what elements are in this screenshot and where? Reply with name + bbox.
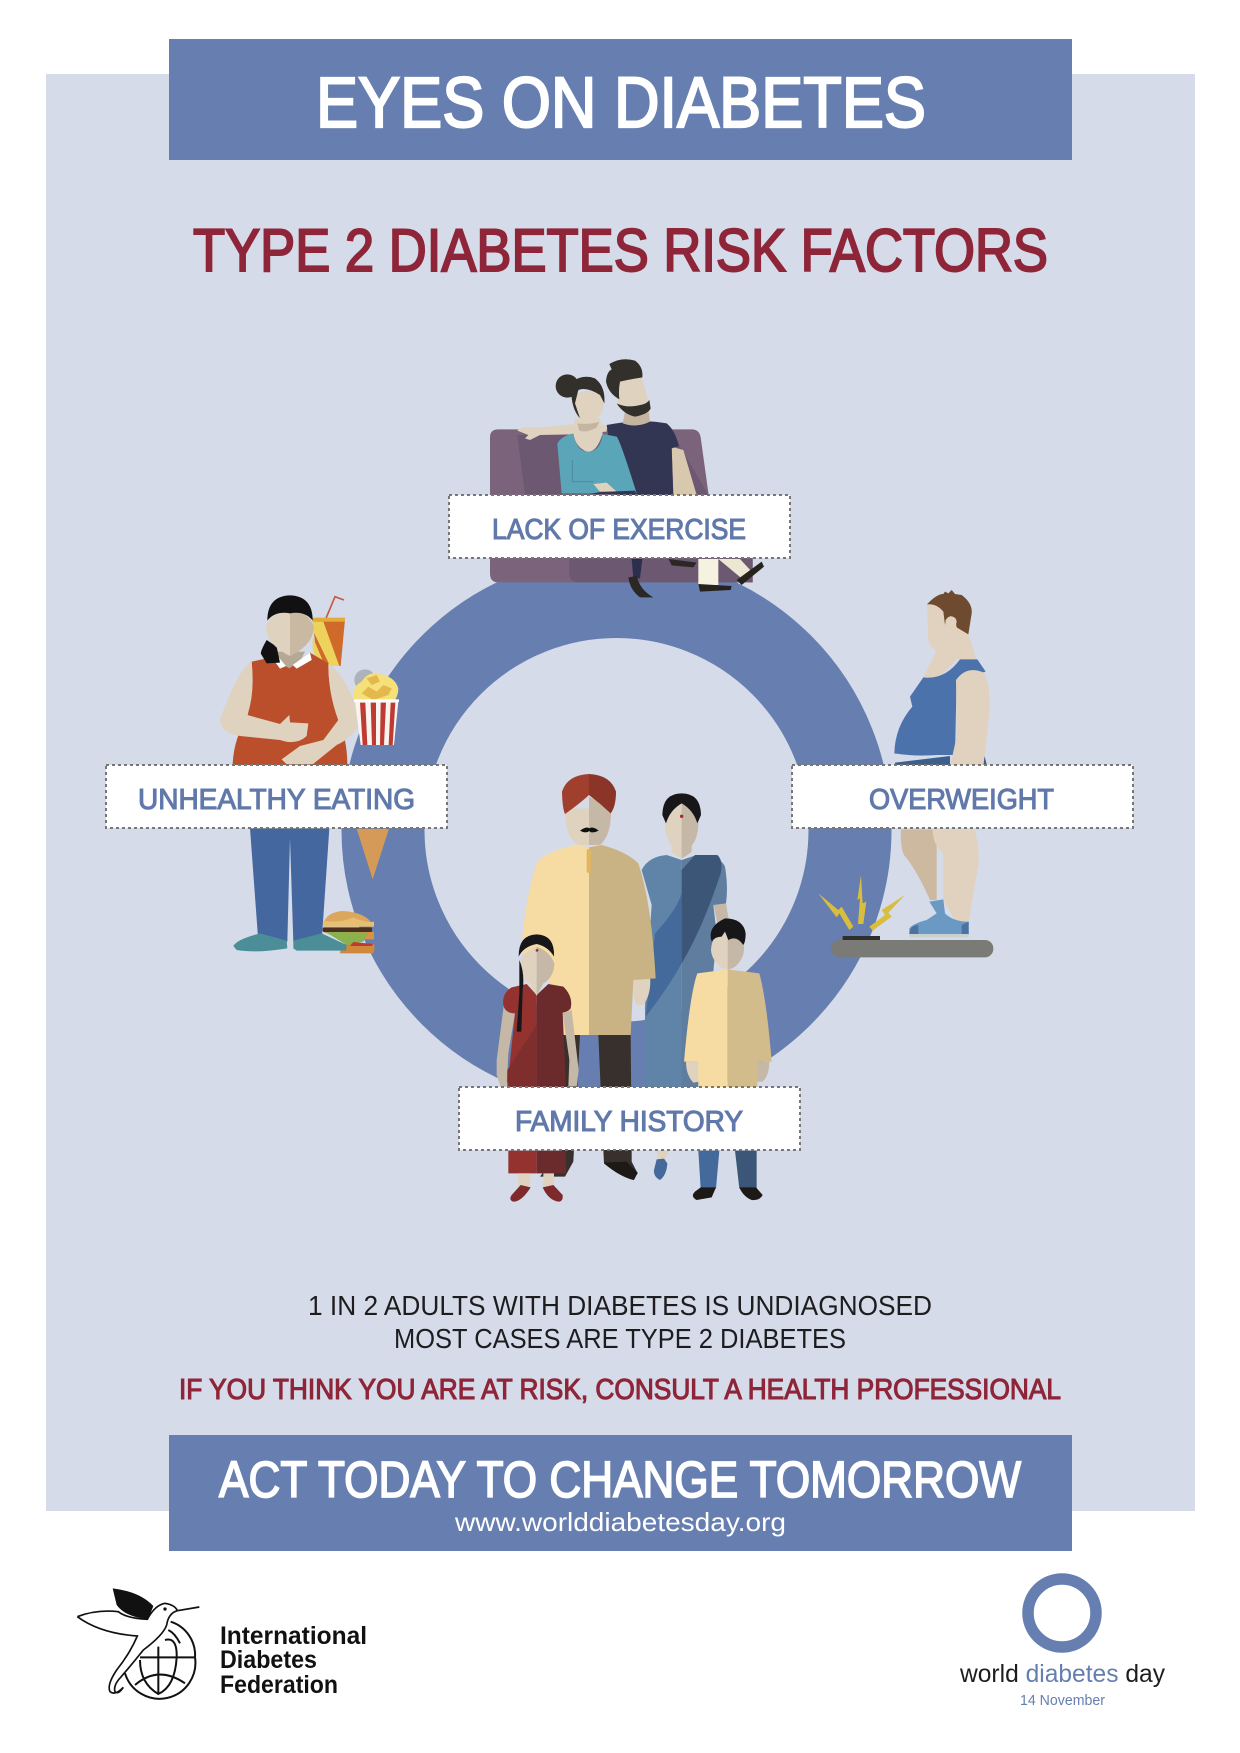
logo: International Diabetes Federation: Diabetes <box>220 1646 317 1674</box>
illustration: family <box>497 774 772 1202</box>
woman <box>642 793 729 1180</box>
logo: International Diabetes Federation: International <box>220 1622 367 1650</box>
footer banner <box>169 1435 1072 1551</box>
label: unhealthy eating <box>106 765 447 828</box>
ring <box>383 596 850 1064</box>
label: overweight: OVERWEIGHT <box>869 784 1054 816</box>
footer banner: ACT TODAY TO CHANGE TOMORROW <box>219 1451 1021 1508</box>
label: family history: FAMILY HISTORY <box>515 1106 743 1138</box>
header banner <box>169 39 1072 160</box>
logo: world diabetes day <box>959 1579 1165 1709</box>
logo: world diabetes day: world diabetes day <box>959 1660 1165 1688</box>
logo: International Diabetes Federation <box>77 1588 367 1699</box>
logo: International Diabetes Federation: Federation <box>220 1671 338 1699</box>
subtitle: TYPE 2 DIABETES RISK FACTORS <box>193 217 1048 284</box>
background panel <box>46 74 1195 1511</box>
girl <box>497 934 579 1202</box>
label: lack of exercise: LACK OF EXERCISE <box>492 514 746 546</box>
man <box>522 774 656 1180</box>
illustration: overweight man on scale <box>818 590 993 957</box>
footer banner: www.worlddiabetesday.org <box>454 1507 786 1537</box>
illustration: couple on sofa <box>490 359 764 597</box>
statement text: 1 IN 2 ADULTS WITH DIABETES IS UNDIAGNOSED <box>308 1290 932 1321</box>
header banner: EYES ON DIABETES <box>316 64 926 143</box>
logo: world diabetes day: 14 November <box>1020 1692 1105 1709</box>
illustration: person with unhealthy food <box>220 595 399 953</box>
statement text: MOST CASES ARE TYPE 2 DIABETES <box>394 1323 846 1354</box>
boy <box>684 918 772 1200</box>
label: family history <box>459 1087 800 1150</box>
statement text <box>308 1290 932 1354</box>
label: overweight <box>792 765 1133 828</box>
label: lack of exercise <box>449 495 790 558</box>
label: unhealthy eating: UNHEALTHY EATING <box>138 784 415 816</box>
call to action text: IF YOU THINK YOU ARE AT RISK, CONSULT A HEALTH PROFESSIONAL <box>179 1374 1061 1406</box>
